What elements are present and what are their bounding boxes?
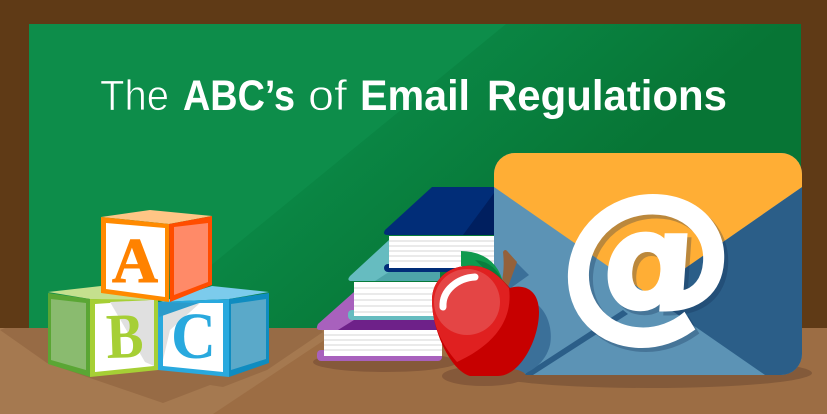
teal book (348, 240, 440, 320)
title: ABC’s (183, 72, 295, 120)
alphabet blocks (48, 210, 269, 377)
apple (432, 250, 551, 386)
title: Regulations (487, 72, 727, 120)
letter C: C (171, 300, 216, 373)
at sign: @ (553, 159, 741, 357)
chalkboard (29, 24, 801, 334)
envelope shadow (488, 358, 812, 388)
at sign shadow: @ (557, 163, 745, 361)
envelope (488, 153, 812, 388)
apple desk shadow (442, 366, 526, 386)
purple book (317, 292, 442, 361)
stack of books (313, 187, 494, 372)
apple shadow on envelope (500, 258, 551, 375)
block A (101, 210, 212, 302)
apple stem (501, 250, 517, 287)
letter A: A (112, 225, 158, 296)
apple body (432, 266, 539, 376)
apple highlight (434, 269, 500, 335)
envelope right flap (648, 187, 802, 375)
apple leaf (461, 251, 504, 286)
block C (158, 286, 269, 377)
wooden desk (0, 328, 827, 414)
title (100, 72, 727, 120)
block B (48, 286, 158, 377)
envelope seam (523, 310, 628, 375)
title: Email (360, 72, 470, 120)
books shadow (313, 352, 457, 372)
title: of (308, 72, 348, 120)
title: The (100, 72, 169, 120)
envelope top flap (494, 153, 802, 294)
navy book (384, 187, 494, 272)
letter B: B (105, 300, 144, 372)
